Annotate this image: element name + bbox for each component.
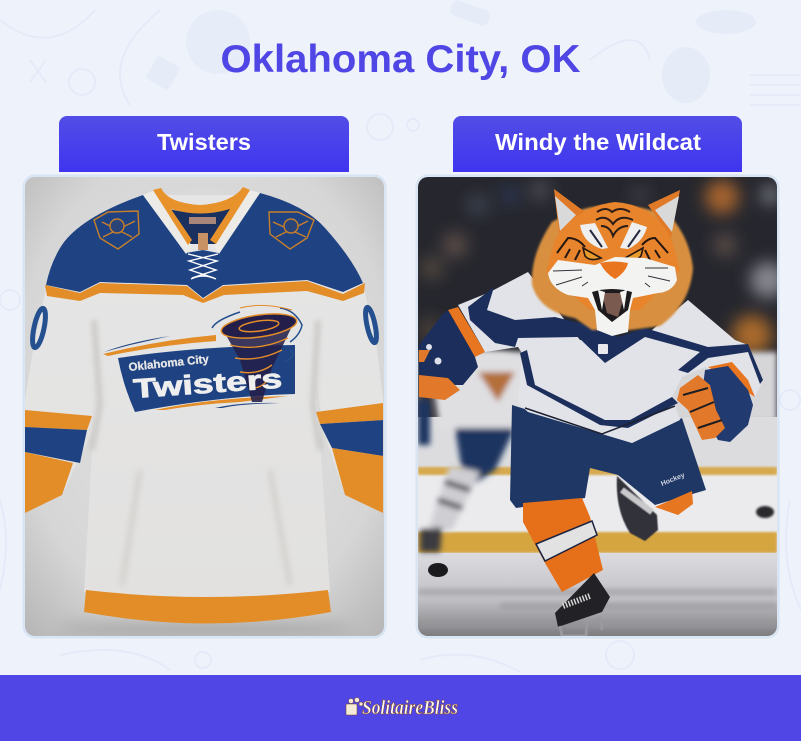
logo: Oklahoma City [128, 354, 210, 374]
ears [554, 189, 585, 233]
sleeve numbers [30, 307, 48, 349]
logo [103, 305, 302, 412]
right glove [677, 366, 753, 442]
hem [84, 590, 331, 624]
brow patches [580, 223, 608, 249]
back skate [617, 476, 658, 541]
footer band [0, 675, 801, 741]
eyes [583, 248, 643, 260]
left glove [419, 310, 478, 400]
panel: jersey photo [23, 175, 386, 640]
mascot head [532, 189, 693, 336]
jersey [458, 272, 763, 443]
sock [523, 498, 603, 592]
nose [600, 262, 628, 279]
right arm cuff [708, 362, 755, 397]
puck [428, 563, 448, 577]
mask stripes [557, 238, 668, 260]
laces [188, 254, 218, 279]
mane [532, 205, 693, 330]
yoke [46, 193, 363, 298]
title: Oklahoma City, OK [220, 38, 580, 81]
tab: Twisters: Twisters [157, 129, 251, 155]
panel: mascot photo: Hockey [660, 472, 686, 488]
puck blurred [756, 506, 774, 518]
white muzzle [548, 257, 677, 336]
shoulder band [45, 281, 365, 303]
tab: Windy the Wildcat: Windy the Wildcat [495, 129, 701, 155]
shorts [510, 405, 706, 508]
face [546, 202, 680, 310]
mouth [592, 289, 632, 322]
orange knee [655, 491, 693, 515]
left sleeve stripes [25, 410, 92, 430]
left arm cuff [448, 307, 485, 357]
skate [555, 573, 610, 636]
jersey [25, 187, 383, 624]
arena background [418, 177, 786, 636]
background player [418, 351, 530, 552]
logo: Twisters [132, 364, 283, 404]
whiskers [553, 268, 670, 287]
tab: Windy the Wildcat [453, 116, 742, 172]
crest right [269, 212, 314, 249]
crest left [94, 211, 139, 249]
logo icon [346, 698, 363, 715]
panel: mascot photo [416, 175, 786, 638]
tab: Twisters [59, 116, 349, 172]
collar [143, 190, 192, 254]
right sleeve stripes [316, 403, 383, 424]
forehead stripes [596, 209, 633, 236]
footer logo: SolitaireBliss: SolitaireBliss [362, 697, 458, 719]
neck interior [171, 209, 230, 244]
